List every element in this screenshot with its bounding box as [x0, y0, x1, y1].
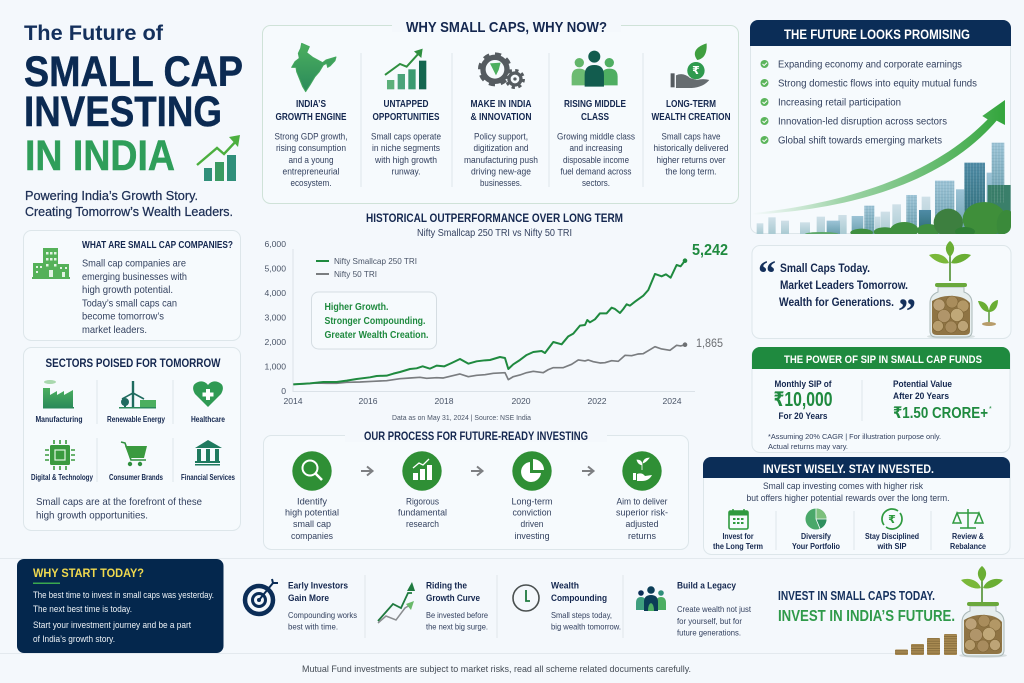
heading: [426, 580, 480, 604]
checklist: Increasing retail participation: [778, 98, 901, 108]
column: untapped opportunities: [371, 49, 441, 177]
step text: Rigorous: [406, 496, 439, 508]
monthly sip amount: For 20 Years: [778, 411, 828, 422]
icon: small plant: [978, 300, 998, 326]
icon: financial services: [195, 440, 222, 466]
body text: Start your investment journey and be a part: [33, 620, 191, 631]
body text: Be invested before: [426, 610, 488, 620]
body text: Small steps today,: [551, 610, 612, 620]
y axis: 1,000: [264, 362, 286, 372]
label: Your Portfolio: [792, 542, 840, 551]
monthly sip amount: Monthly SIP of: [774, 379, 832, 390]
body text: the next big surge.: [426, 622, 488, 632]
footnote: [768, 432, 941, 451]
end point: nifty 50: [683, 342, 687, 347]
panel: invest wisely: [703, 457, 1010, 554]
label: manufacturing: Manufacturing: [36, 415, 83, 424]
icon: hand with rupee and leaf: [671, 43, 709, 88]
y axis: 4,000: [264, 288, 286, 298]
heading: HISTORICAL OUTPERFORMANCE OVER LONG TERM: [366, 211, 623, 225]
body text: and increasing: [570, 143, 622, 153]
city skyline: [757, 143, 1017, 240]
body text: future generations.: [677, 628, 741, 638]
body text: [371, 132, 441, 176]
column: long-term wealth creation: [652, 43, 730, 176]
heading: [288, 580, 348, 604]
quote text: Market Leaders Tomorrow.: [780, 280, 908, 292]
body text: [82, 258, 187, 336]
tagline: [25, 189, 233, 219]
quote text: [779, 263, 908, 309]
arrow: [582, 466, 594, 476]
body text: Small cap companies are: [82, 258, 186, 270]
closing quote mark: ”: [898, 291, 916, 331]
body text: with high growth: [374, 155, 437, 165]
legend: Nifty 50 TRI: [334, 269, 377, 279]
label: Rebalance: [950, 542, 986, 551]
x axis: 2018: [434, 396, 454, 406]
step text: adjusted: [626, 519, 658, 530]
x axis: 2014: [283, 396, 303, 406]
heading: Gain More: [288, 593, 329, 604]
icon: bars and arrow: [385, 49, 426, 89]
body text: in niche segments: [372, 143, 440, 153]
heading: WHAT ARE SMALL CAP COMPANIES?: [82, 240, 233, 251]
icon: people: [572, 51, 618, 87]
icon: india map: [292, 43, 336, 92]
body text: [557, 132, 635, 188]
callout: Stronger Compounding.: [324, 315, 426, 327]
body text: Strong GDP growth,: [274, 132, 348, 142]
heading: OUR PROCESS FOR FUTURE-READY INVESTING: [364, 431, 588, 443]
heading: WEALTH CREATION: [652, 112, 730, 123]
x axis: 2024: [662, 396, 682, 406]
body text: fuel demand across: [560, 166, 632, 176]
disclaimer: Mutual Fund investments are subject to market risks, read all scheme related documents carefully.: [302, 664, 691, 675]
label: [792, 532, 840, 551]
step text: superior risk-: [616, 508, 668, 518]
callout: Higher Growth.: [324, 301, 389, 313]
x axis: 2016: [358, 396, 378, 406]
icon: digital and technology: [45, 440, 75, 470]
heading: INVEST WISELY. STAY INVESTED.: [763, 462, 934, 476]
body text: manufacturing push: [464, 155, 538, 165]
step text: fundamental: [398, 508, 447, 518]
step text: research: [406, 519, 439, 530]
icon: manufacturing: [43, 380, 74, 408]
x axis: 2020: [511, 396, 531, 406]
label: healthcare: Healthcare: [191, 415, 225, 424]
icon: people: [636, 586, 666, 611]
step text: high potential: [285, 508, 339, 518]
body text: ecosystem.: [290, 178, 332, 188]
icon: target: [245, 579, 278, 614]
step text: [285, 496, 339, 542]
y axis: 0: [281, 386, 286, 396]
heading: Growth Curve: [426, 593, 480, 604]
line: nifty 50 tri: [293, 345, 685, 384]
body text: high growth opportunities.: [36, 510, 148, 522]
heading: MAKE IN INDIA: [470, 99, 532, 110]
quote text: Small Caps Today.: [780, 263, 870, 275]
callout: Greater Wealth Creation.: [324, 329, 429, 341]
body text: [36, 496, 202, 522]
label: Diversify: [801, 532, 831, 541]
label: Review &: [952, 532, 984, 541]
body text: businesses.: [480, 178, 522, 188]
title: the future of: The Future of: [24, 22, 164, 45]
body text: [464, 132, 538, 188]
body text: for yourself, but for: [677, 616, 742, 626]
column: rising middle class: [557, 51, 635, 188]
value: 1,865: 1,865: [696, 338, 723, 350]
step text: Long-term: [512, 496, 553, 508]
heading: [564, 99, 626, 123]
heading: Early Investors: [288, 580, 348, 592]
body text: market leaders.: [82, 324, 147, 336]
panel: what are small cap companies: [24, 230, 240, 340]
body text: [746, 481, 950, 503]
title: investing: INVESTING: [24, 88, 222, 136]
body text: Growing middle class: [557, 132, 635, 142]
icon: growth chart: [197, 135, 240, 181]
step text: companies: [291, 531, 333, 542]
icon: growth arrows: [378, 582, 415, 623]
line: nifty smallcap 250 tri: [293, 261, 685, 384]
checklist: Expanding economy and corporate earnings: [778, 60, 962, 70]
label: [713, 532, 763, 551]
step text: conviction: [512, 508, 552, 518]
y axis: 5,000: [264, 264, 286, 274]
step text: Identify: [297, 496, 327, 508]
potential value: [893, 379, 992, 422]
icon: rupee cycle: ₹: [888, 514, 896, 526]
heading: [652, 99, 730, 123]
step text: driven: [520, 519, 544, 530]
body text: best with time.: [288, 622, 338, 632]
panel: why small caps, why now: [262, 19, 738, 204]
icon: consumer brands: [121, 442, 147, 466]
label: consumer brands: Consumer Brands: [109, 473, 163, 482]
body text: [551, 610, 621, 632]
label: renewable energy: Renewable Energy: [107, 415, 165, 424]
body text: disposable income: [563, 155, 629, 165]
body text: become tomorrow’s: [82, 310, 164, 322]
x axis: 2022: [587, 396, 607, 406]
legend: [316, 256, 417, 279]
label: [950, 532, 986, 551]
arrow: [471, 466, 482, 476]
body text: Create wealth not just: [677, 604, 752, 614]
icon: rupee cycle: [882, 509, 902, 529]
icon: gears: [480, 54, 524, 88]
icon: magnifier: [292, 451, 332, 491]
icon: pie chart: [806, 508, 826, 530]
body text: higher returns over: [656, 155, 726, 165]
body text: the long term.: [666, 166, 716, 176]
panel: our process: [264, 430, 688, 550]
heading: GROWTH ENGINE: [276, 112, 347, 123]
monthly sip amount: ₹10,000: [774, 389, 832, 411]
potential value: Potential Value: [893, 379, 952, 390]
call to action: [778, 566, 1007, 658]
icon: hand and plant: [622, 451, 662, 491]
icon: calendar: [729, 509, 748, 529]
growth arrow: [752, 100, 1005, 215]
heading: OPPORTUNITIES: [372, 112, 440, 123]
body text: but offers higher potential rewards over the long term.: [746, 493, 950, 503]
body text: Small caps have: [662, 132, 720, 142]
checklist: [760, 60, 977, 146]
heading: Riding the: [426, 580, 467, 592]
value: 5,242: 5,242: [692, 242, 728, 259]
heading: Compounding: [551, 593, 607, 604]
heading: [372, 99, 440, 123]
arrow: [361, 466, 372, 476]
legend: Nifty Smallcap 250 TRI: [334, 256, 417, 266]
heading: [470, 99, 532, 123]
body text: and a young: [288, 155, 334, 165]
potential value: *: [989, 406, 992, 413]
heading: LONG-TERM: [666, 99, 716, 110]
step 1: [285, 451, 339, 542]
body text: runway.: [392, 166, 420, 176]
body text: digitization and: [474, 143, 528, 153]
step text: investing: [514, 531, 550, 542]
y axis: 2,000: [264, 337, 286, 347]
body text: The next best time is today.: [33, 604, 132, 615]
feature: build a legacy: [636, 580, 752, 638]
body text: [274, 132, 348, 188]
icon: coin jar with plant: [959, 566, 1007, 658]
body text: Small cap investing comes with higher risk: [763, 481, 923, 491]
panel: historical outperformance chart: [264, 211, 728, 422]
body text: sectors.: [582, 178, 610, 188]
heading: Build a Legacy: [677, 580, 737, 592]
label: financial services: Financial Services: [181, 473, 235, 482]
checklist: Strong domestic flows into equity mutual funds: [778, 78, 977, 90]
heading: WHY START TODAY?: [33, 566, 144, 580]
body text: The best time to invest in small caps was yesterday.: [33, 590, 214, 601]
body text: [677, 604, 752, 638]
tagline: Creating Tomorrow’s Wealth Leaders.: [25, 205, 233, 219]
label: with SIP: [877, 542, 907, 551]
title: in india: IN INDIA: [25, 132, 175, 180]
body text: high growth potential.: [82, 284, 173, 296]
step 3: [512, 451, 553, 542]
step text: [616, 496, 668, 542]
body text: Compounding works: [288, 610, 357, 620]
icon: pie: [512, 451, 552, 491]
column: india's growth engine: [274, 43, 348, 188]
body text: Today’s small caps can: [82, 298, 177, 310]
title block: [24, 22, 243, 219]
column: make in india and innovation: [464, 54, 538, 188]
heading: THE FUTURE LOOKS PROMISING: [784, 27, 970, 42]
body text: [288, 610, 357, 632]
heading: UNTAPPED: [384, 99, 428, 110]
label: the Long Term: [713, 542, 763, 551]
label: [865, 532, 919, 551]
icon: scales: [953, 509, 983, 528]
body text: Small caps operate: [371, 132, 441, 142]
step text: [512, 496, 553, 542]
label: Invest for: [722, 532, 754, 541]
source note: Data as on May 31, 2024 | Source: NSE India: [392, 413, 532, 422]
body text: emerging businesses with: [82, 271, 187, 283]
y axis: 3,000: [264, 312, 286, 322]
step 4: [616, 451, 668, 542]
icon: healthcare: [193, 381, 223, 407]
heading: RISING MIDDLE: [564, 99, 626, 110]
feature: early investors gain more: [245, 579, 357, 632]
step text: returns: [628, 531, 656, 542]
end point: smallcap: [683, 258, 687, 263]
footnote: *Assuming 20% CAGR | For illustration purpose only.: [768, 432, 941, 441]
body text: [654, 132, 728, 176]
rupee sign on coin: ₹: [692, 65, 700, 77]
body text: [426, 610, 488, 632]
checklist: Global shift towards emerging markets: [778, 136, 942, 146]
body text: Small caps are at the forefront of these: [36, 496, 202, 508]
icon: coin jar with plant: [927, 241, 975, 339]
heading: [276, 99, 347, 123]
title: small cap: SMALL CAP: [24, 48, 243, 96]
body text: entrepreneurial: [282, 166, 340, 176]
panel: power of sip: [752, 347, 1010, 452]
potential value: ₹1.50 CRORE+: [893, 405, 988, 422]
body text: of India’s growth story.: [33, 634, 115, 645]
icon: coin stacks: [895, 634, 957, 655]
feature: riding the growth curve: [378, 580, 488, 632]
quote text: Wealth for Generations.: [779, 297, 894, 309]
checklist: Innovation-led disruption across sectors: [778, 116, 947, 128]
heading: & INNOVATION: [470, 112, 532, 123]
label: Stay Disciplined: [865, 532, 919, 541]
body text: driving new-age: [471, 166, 531, 176]
y axis: [264, 239, 286, 396]
heading: [551, 580, 607, 604]
panel: quote: [752, 241, 1011, 339]
line 1: INVEST IN SMALL CAPS TODAY.: [778, 589, 935, 603]
icon: renewable energy: [119, 381, 156, 408]
callout: [312, 292, 436, 349]
x axis: [283, 249, 695, 406]
opening quote mark: “: [758, 253, 776, 293]
label: digital and technology: Digital & Technology: [31, 473, 93, 482]
step text: small cap: [293, 519, 331, 530]
icon: bars: [402, 451, 442, 491]
heading: SECTORS POISED FOR TOMORROW: [46, 356, 221, 370]
heading: Wealth: [551, 580, 579, 592]
line 2: INVEST IN INDIA’S FUTURE.: [778, 608, 955, 625]
feature: wealth compounding: [513, 580, 621, 632]
step 2: [398, 451, 447, 530]
monthly sip amount: [774, 379, 832, 422]
icon: buildings: [32, 248, 70, 279]
footnote: Actual returns may vary.: [768, 442, 848, 451]
heading: INDIA’S: [296, 99, 326, 110]
tagline: Powering India’s Growth Story.: [25, 189, 198, 203]
body text: [33, 590, 214, 645]
step text: Aim to deliver: [616, 496, 668, 508]
body text: rising consumption: [276, 143, 346, 153]
potential value: After 20 Years: [893, 391, 949, 402]
heading: THE POWER OF SIP IN SMALL CAP FUNDS: [784, 354, 982, 366]
panel: the future looks promising: [750, 20, 1017, 240]
step text: [398, 496, 447, 530]
body text: Policy support,: [474, 132, 528, 142]
heading: CLASS: [581, 112, 609, 123]
panel: why start today: [17, 559, 224, 653]
panel: sectors poised for tomorrow: [24, 348, 240, 530]
body text: historically delivered: [654, 143, 728, 153]
y axis: 6,000: [264, 239, 286, 249]
heading: WHY SMALL CAPS, WHY NOW?: [406, 19, 607, 36]
icon: clock: [513, 585, 539, 611]
body text: big wealth tomorrow.: [551, 622, 621, 632]
subtitle: Nifty Smallcap 250 TRI vs Nifty 50 TRI: [417, 228, 572, 239]
